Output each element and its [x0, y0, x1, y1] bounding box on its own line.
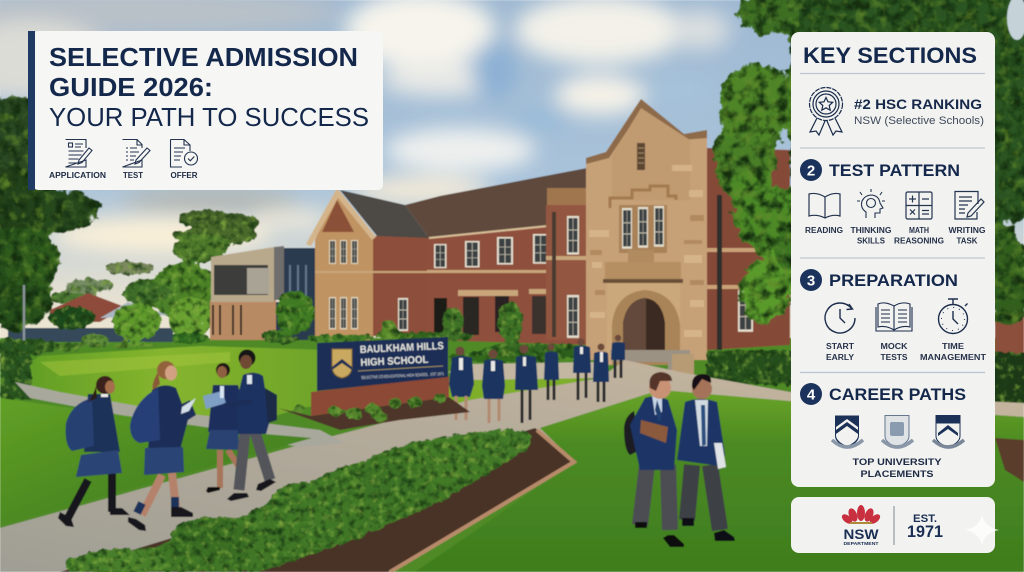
sign garden bed [278, 397, 470, 430]
test labels: READING [805, 226, 843, 235]
left shrubs and trees [0, 296, 212, 356]
icon: university crest two [882, 416, 913, 447]
front left lawn [0, 398, 312, 525]
panel: key sections [791, 32, 995, 487]
back lawn [0, 346, 590, 424]
sandstone tower [586, 99, 707, 380]
left gabled wing [306, 188, 430, 340]
sky with clouds [0, 0, 1024, 360]
lamp post [23, 285, 25, 358]
step labels: OFFER [170, 171, 198, 180]
right brick wing [707, 148, 1024, 355]
section: test pattern: 2 [807, 162, 815, 180]
title heading [49, 44, 369, 132]
icon: offer [170, 140, 198, 167]
step labels: APPLICATION [49, 171, 106, 180]
icon: application [66, 140, 92, 167]
right tree [713, 0, 1024, 330]
icon: writing task [955, 192, 984, 219]
student with ring binder [203, 363, 243, 493]
icon: mock tests book [876, 303, 912, 331]
right garden bed [995, 438, 1024, 482]
student walking left [58, 376, 130, 527]
modern building [210, 246, 316, 340]
preparation labels: TESTS [880, 353, 908, 362]
test labels: MATH [909, 226, 929, 235]
preparation labels [826, 342, 986, 362]
ranking text: NSW (Selective Schools) [854, 115, 984, 127]
icon: NSW waratah [840, 505, 882, 526]
two foreground students [624, 372, 735, 547]
preparation labels: TIME [942, 342, 964, 351]
student group left [58, 350, 277, 531]
icon: ranking badge [810, 88, 842, 135]
student with notebook [677, 374, 735, 541]
title heading: GUIDE 2026: [49, 74, 213, 102]
icon: sparkle [965, 514, 999, 546]
ground base [0, 338, 1024, 572]
sign text [360, 340, 445, 380]
student with folder [624, 372, 684, 547]
section: career paths: 4 [807, 386, 816, 404]
career label: PLACEMENTS [860, 469, 934, 480]
school main building [306, 99, 1024, 380]
step labels [49, 171, 198, 180]
student with grey trousers [224, 350, 277, 501]
school sign [311, 337, 449, 416]
ranking text: #2 HSC RANKING [854, 96, 982, 112]
established year: EST. [913, 513, 937, 525]
icon: thinking skills [857, 189, 885, 218]
icon: test [122, 140, 150, 167]
heading: key sections: KEY SECTIONS [803, 43, 977, 68]
shrubs by modern building [170, 290, 315, 344]
section: preparation [800, 269, 986, 362]
front right lawn [415, 390, 1024, 572]
icon: university crest one [832, 416, 863, 447]
left large tree [0, 91, 100, 333]
preparation labels: MOCK [880, 342, 908, 351]
NSW logo text: NSW [844, 526, 879, 542]
test labels: SKILLS [857, 236, 885, 246]
test labels [805, 226, 986, 246]
distant house with red roof [8, 293, 173, 342]
section: preparation: PREPARATION [829, 271, 958, 290]
preparation labels: EARLY [826, 353, 855, 362]
step labels: TEST [123, 171, 143, 180]
section: test pattern [800, 159, 986, 246]
test labels: TASK [956, 236, 978, 246]
career label: TOP UNIVERSITY [852, 457, 942, 468]
NSW logo text: DEPARTMENT [844, 541, 879, 546]
sky gap in right tree [1007, 0, 1024, 40]
established year: 1971 [907, 522, 943, 541]
section: preparation: 3 [807, 272, 815, 290]
title panel [28, 31, 383, 190]
preparation labels: START [826, 342, 854, 351]
panel: NSW department and established year [791, 497, 999, 553]
test labels: REASONING [894, 236, 944, 246]
preparation labels: MANAGEMENT [920, 353, 986, 362]
section: test pattern: TEST PATTERN [829, 161, 960, 180]
test labels: WRITING [948, 226, 986, 235]
distant gum tree [50, 209, 261, 322]
icon: reading [809, 193, 840, 218]
title heading: YOUR PATH TO SUCCESS [49, 104, 369, 132]
title heading: SELECTIVE ADMISSION [49, 44, 358, 72]
icon: university crest three [933, 416, 964, 447]
section: career paths [800, 383, 966, 480]
campus hedges [0, 301, 1024, 404]
entrance students [449, 335, 625, 423]
sign text: SELECTIVE CO-EDUCATIONAL HIGH SCHOOL . EST 1971 [361, 371, 445, 380]
paths [0, 360, 1024, 572]
student with backpack and book [128, 361, 196, 531]
icon: math reasoning [906, 192, 932, 219]
career label [852, 457, 942, 480]
sign text: HIGH SCHOOL [360, 354, 429, 369]
ranking text [854, 96, 984, 127]
sign crest [332, 349, 352, 378]
section: career paths: CAREER PATHS [829, 385, 966, 404]
sign text: BAULKHAM HILLS [360, 340, 444, 356]
front hedge [65, 428, 534, 572]
test labels: THINKING [850, 226, 892, 235]
garden bed [60, 428, 574, 572]
icon: time management stopwatch [938, 299, 968, 334]
established year [907, 513, 943, 541]
icon: start early clock [825, 303, 855, 333]
central brick range and roof [405, 168, 590, 345]
sign shrubs [294, 394, 447, 423]
